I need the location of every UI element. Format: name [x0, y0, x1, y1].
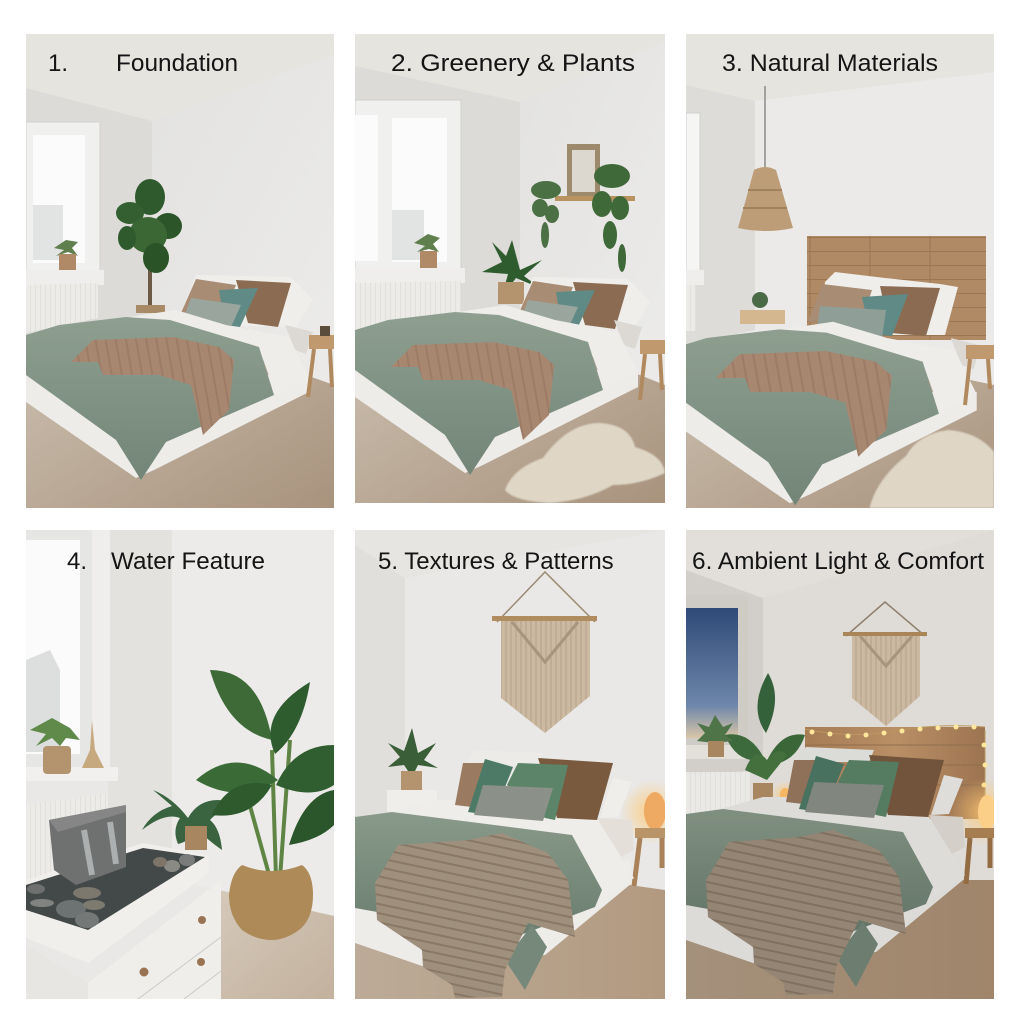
- radiator: [26, 283, 98, 333]
- window: [686, 595, 756, 759]
- title: 4.: [67, 548, 87, 575]
- wooden headboard with lights: [805, 724, 988, 819]
- sill plant: [30, 718, 80, 774]
- bedside lamp: [620, 780, 684, 886]
- floor: [686, 880, 994, 999]
- small lamp: [771, 781, 799, 809]
- pillows: [182, 279, 291, 327]
- hanging plant left: [531, 181, 561, 248]
- large plant: [196, 670, 334, 878]
- sheepskin rug: [870, 430, 994, 508]
- panel 2: greenery and plants: [355, 34, 665, 503]
- bedside table: [308, 326, 334, 397]
- bedside lamp: [952, 778, 1020, 884]
- floor: [26, 360, 334, 508]
- title: 2. Greenery & Plants: [391, 50, 635, 77]
- title: 5. Textures & Patterns: [378, 548, 614, 575]
- macrame wall hanging: [492, 572, 597, 733]
- pillows: [520, 277, 628, 329]
- floor: [210, 888, 334, 999]
- hanging plant right: [592, 164, 630, 272]
- title: Water Feature: [111, 548, 265, 575]
- panel 4: water feature: [26, 530, 334, 999]
- bed with pillows and knit throw: [686, 747, 965, 995]
- window: [26, 122, 104, 285]
- floor plant: [482, 240, 542, 304]
- radiator: [355, 281, 461, 334]
- fountain block: [49, 805, 126, 885]
- title: 6. Ambient Light & Comfort: [692, 548, 984, 575]
- floor: [686, 371, 994, 508]
- white cabinet: [26, 880, 221, 999]
- brown throw: [71, 337, 234, 435]
- sill: [26, 767, 118, 781]
- bedside table: [965, 345, 994, 405]
- basin: [26, 843, 209, 963]
- floor: [355, 885, 665, 999]
- sill plant: [697, 715, 733, 757]
- panel 3: natural materials: [671, 34, 994, 508]
- macrame wall hanging: [843, 602, 927, 726]
- small table with plant: [740, 292, 785, 324]
- title: 1.: [48, 50, 68, 77]
- pillows: [808, 272, 958, 338]
- wooden headboard: [807, 236, 986, 340]
- radiator: [686, 772, 750, 818]
- fig plant: [116, 179, 182, 313]
- sheepskin rug: [505, 423, 665, 503]
- title: Foundation: [116, 50, 238, 77]
- brown throw: [716, 351, 892, 457]
- panel 5: textures and patterns: [355, 530, 684, 999]
- panel 1: foundation: [26, 34, 334, 508]
- window: [686, 113, 704, 285]
- bed and duvet: [671, 322, 981, 505]
- woven basket: [229, 865, 313, 940]
- radiator: [686, 285, 696, 331]
- left bedside table: [745, 803, 795, 813]
- figurine: [82, 720, 104, 768]
- windowsill plant: [414, 234, 440, 268]
- bed and duvet: [26, 310, 313, 480]
- brown throw: [391, 342, 554, 440]
- panel 6: ambient light and comfort: [686, 530, 1020, 999]
- floor: [355, 356, 665, 503]
- window: [26, 530, 92, 770]
- bed with pillows and knit throw: [355, 750, 634, 998]
- ceiling: [26, 34, 334, 121]
- title: 3. Natural Materials: [722, 50, 938, 77]
- water and stones: [26, 848, 205, 930]
- radiator: [26, 793, 108, 880]
- bed and duvet: [355, 305, 642, 475]
- bedside table: [640, 340, 665, 400]
- windowsill plant: [54, 240, 78, 270]
- side table with plant: [387, 728, 438, 812]
- small floor plant: [142, 790, 240, 850]
- shelf with frame: [555, 144, 635, 201]
- plant: [725, 673, 805, 803]
- title: [50, 54, 236, 71]
- pendant lamp: [738, 86, 793, 231]
- window: [355, 100, 465, 283]
